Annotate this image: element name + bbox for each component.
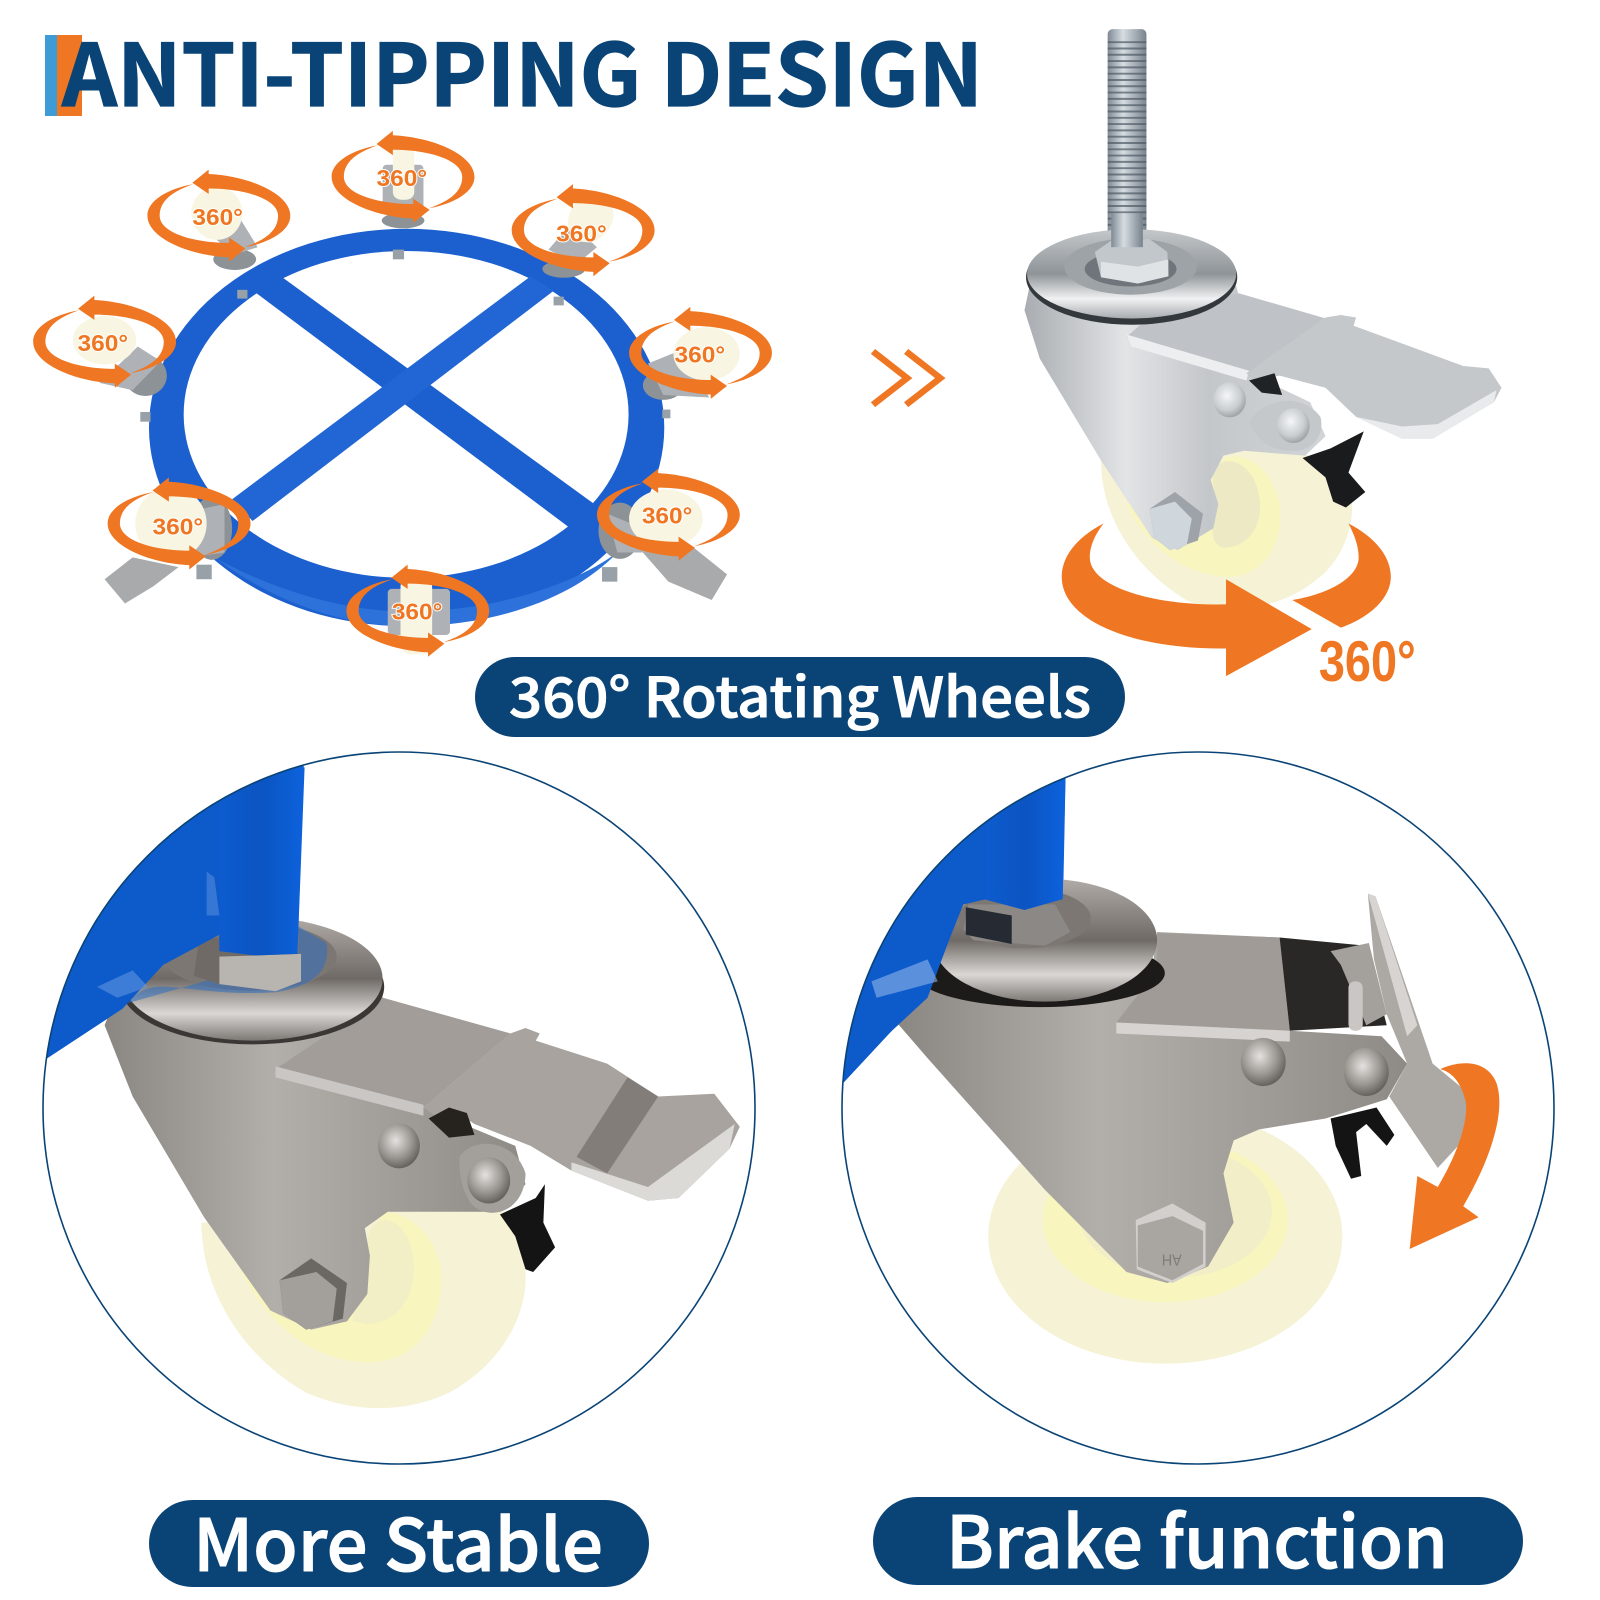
wheel <box>1101 451 1352 609</box>
circle outline <box>842 752 1554 1464</box>
threaded bolt <box>1108 29 1146 247</box>
caster lower left with brake <box>105 477 251 603</box>
wheel <box>202 1206 526 1408</box>
black brake tab <box>1331 1107 1394 1179</box>
bracket <box>894 932 1407 1283</box>
caster left: 360° <box>78 330 128 357</box>
orange 360 rotation arrow <box>1062 523 1391 676</box>
brake lever <box>423 1028 740 1201</box>
caster top <box>332 131 474 228</box>
caster right <box>629 307 772 400</box>
caster left <box>33 296 176 396</box>
black brake tab <box>1303 431 1365 507</box>
title accent <box>45 35 82 116</box>
caster upper right: 360° <box>556 221 607 247</box>
swivel plate <box>844 782 1165 1082</box>
caster upper left: 360° <box>192 204 243 231</box>
caption pill: brake function: Brake function <box>946 1484 1448 1589</box>
caption pill: 360 rotating wheels: 360° Rotating Wheels <box>509 653 1091 733</box>
brake pedal pivot rivets <box>1213 382 1321 451</box>
swivel plate <box>31 767 384 1069</box>
caster lower left with brake: 360° <box>153 514 203 540</box>
swivel top plate <box>1026 213 1237 325</box>
panel: threaded stem caster <box>1024 29 1502 694</box>
circle clipped artwork <box>31 740 740 1408</box>
rivets <box>378 1123 526 1213</box>
black brake tab <box>500 1184 555 1272</box>
blue ring frame <box>140 229 670 626</box>
panel: brake function close-up <box>831 740 1554 1464</box>
orange brake arrow <box>1410 1063 1499 1249</box>
body bracket <box>1024 286 1331 550</box>
wheel <box>988 1109 1342 1364</box>
rivets <box>1241 1038 1389 1096</box>
caster right: 360° <box>674 342 725 368</box>
arrow: double chevron <box>873 351 940 405</box>
panel: drum dolly with 8 swivel casters <box>33 131 772 657</box>
title: ANTI-TIPPING DESIGN <box>61 6 983 131</box>
caster lower right with brake <box>597 469 740 600</box>
axle bolt <box>280 1258 347 1330</box>
caster upper right <box>512 184 655 278</box>
axle bolt: AH <box>1162 1250 1182 1267</box>
360 degree label: 360° <box>1319 630 1416 694</box>
circle outline <box>43 752 755 1464</box>
circle clipped artwork <box>831 740 1499 1364</box>
caster upper left <box>147 170 290 270</box>
open brake mechanism <box>1280 894 1468 1168</box>
caption pill: more stable: More Stable <box>193 1487 603 1592</box>
caster lower right with brake: 360° <box>642 503 692 529</box>
caster bottom: 360° <box>392 599 442 625</box>
bracket <box>105 981 526 1330</box>
axle bolt <box>1136 1203 1206 1283</box>
caster top: 360° <box>377 166 427 192</box>
caster bottom <box>346 565 489 657</box>
brake lever <box>1246 315 1502 439</box>
blue frame and leg <box>47 766 304 1058</box>
blue frame and leg <box>844 778 1066 1082</box>
axle bolt <box>1149 492 1203 550</box>
panel: more stable close-up <box>31 740 755 1464</box>
